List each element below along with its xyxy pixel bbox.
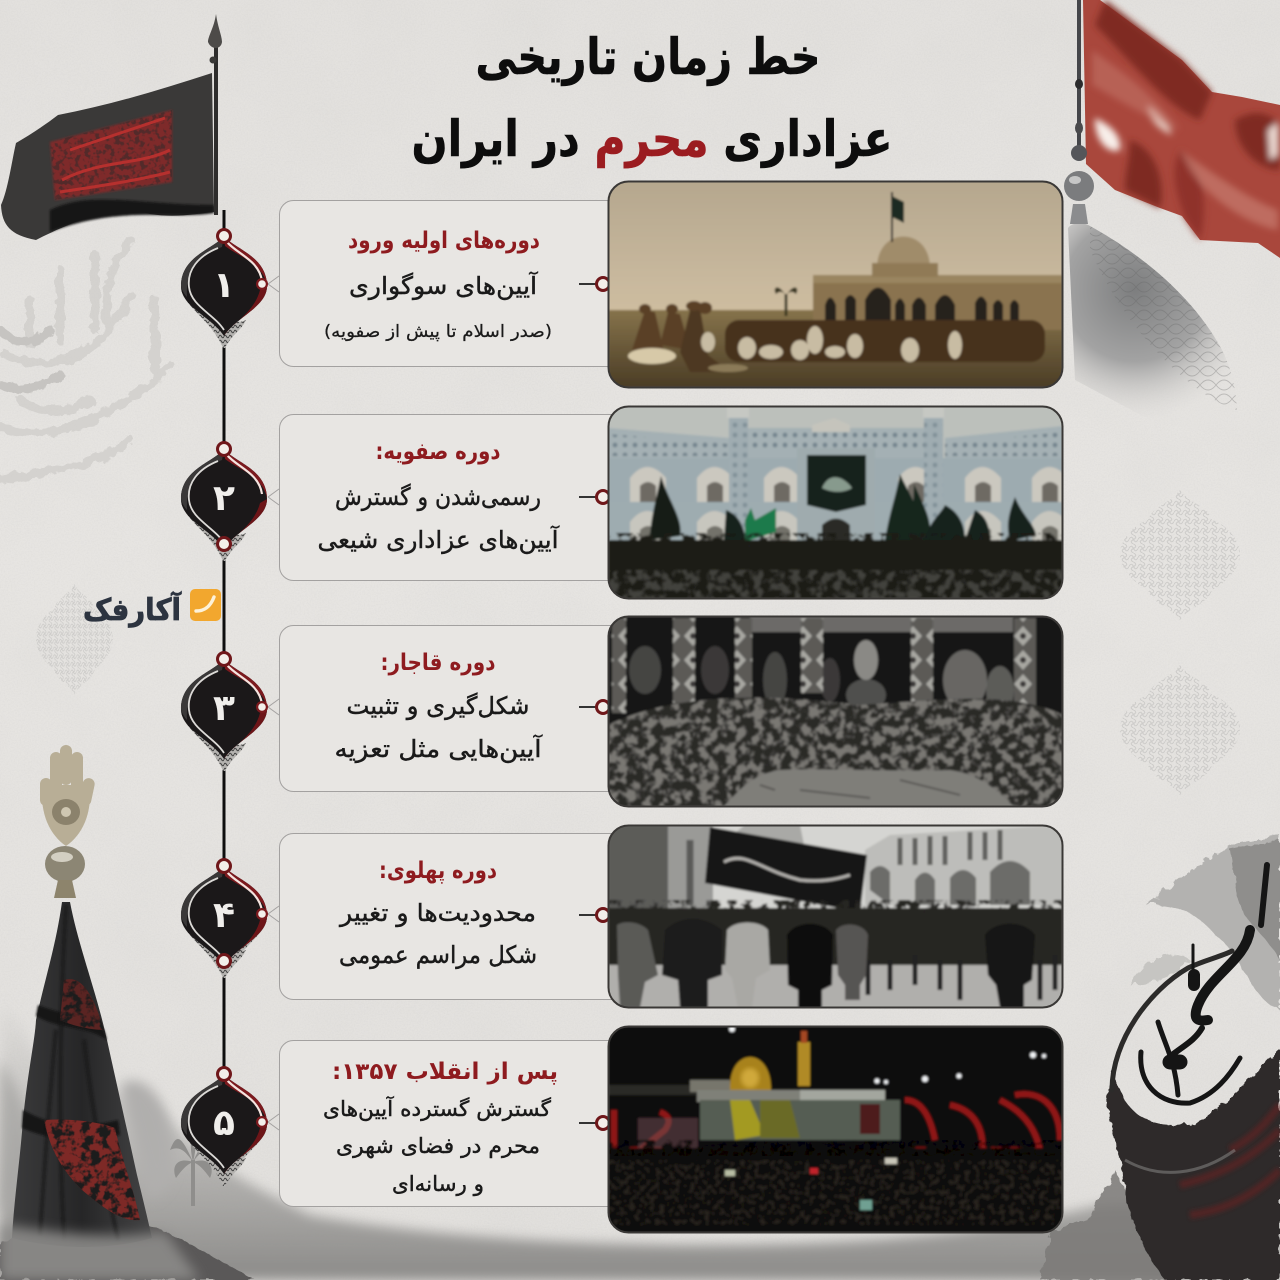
- logo: orange badge and wordmark: آکارفک: [83, 591, 182, 628]
- icon: hand: [40, 745, 96, 846]
- ghost calligraphy left: [0, 240, 170, 480]
- step 1: [181, 200, 624, 366]
- card 2: رسمی‌شدن و گسترش: [335, 483, 541, 511]
- connector 5: [579, 1115, 611, 1131]
- medallion 4: [181, 858, 268, 978]
- card 5: و رسانه‌ای: [392, 1172, 484, 1196]
- alam: hand finial and black cloth: [0, 745, 200, 1280]
- medallion 1: [181, 228, 268, 348]
- step 3: [181, 626, 624, 792]
- medallion 3: [181, 651, 268, 771]
- card 1: آیین‌های سوگواری: [349, 271, 538, 300]
- finial right: [1064, 0, 1094, 224]
- card 5: [268, 1040, 624, 1206]
- card 2: دوره صفویه:: [376, 439, 501, 465]
- card 3: [268, 626, 624, 792]
- card 4: محدودیت‌ها و تغییر: [339, 899, 536, 927]
- photo 4 frame: [608, 826, 1062, 1008]
- flag pole left: [208, 14, 222, 215]
- medallion 5: ۵: [213, 1103, 235, 1144]
- connector 1: [579, 276, 611, 292]
- ornament: right lace top: [1120, 490, 1240, 620]
- smoke and hills at the bottom: [0, 1000, 1280, 1280]
- medallion 1: ۱: [213, 265, 235, 306]
- ink body: [1108, 1048, 1280, 1280]
- title line 2: عزاداری محرم در ایران: [412, 110, 892, 169]
- card 4: [268, 834, 624, 1000]
- medallion 2: ۲: [213, 478, 235, 519]
- dome right: [1068, 223, 1237, 440]
- logo: orange badge and wordmark: [83, 589, 221, 628]
- step 4: [181, 834, 624, 1000]
- ink strokes: [1112, 865, 1267, 1103]
- photo 5: night shrine: [608, 1026, 1063, 1233]
- red streaks: [1180, 1105, 1280, 1215]
- step 5: [181, 1040, 624, 1206]
- photo 1: desert shrine: [608, 181, 1063, 388]
- ornament: left lace: [36, 584, 113, 694]
- card 2: آیین‌های عزاداری شیعی: [318, 525, 560, 554]
- card 3: آیین‌هایی مثل تعزیه: [334, 734, 543, 763]
- card 5: پس از انقلاب ۱۳۵۷:: [332, 1059, 558, 1085]
- card 4: دوره پهلوی:: [379, 858, 497, 884]
- card 4: شکل مراسم عمومی: [339, 941, 537, 969]
- smoke wash: [1130, 835, 1280, 1010]
- photo 4: pahlavi procession: [608, 825, 1063, 1008]
- card 1: دوره‌های اولیه ورود: [348, 228, 540, 254]
- calligraphy bottom right: [1108, 835, 1280, 1280]
- ornament: right lace bottom: [1120, 665, 1240, 795]
- photo 1 frame: [608, 182, 1062, 388]
- medallion 4: ۴: [213, 895, 235, 936]
- step 2: [181, 414, 624, 580]
- connector 4: [579, 907, 611, 923]
- title: [412, 28, 892, 169]
- medallion 5: [181, 1066, 268, 1186]
- card 1: [268, 200, 624, 366]
- photo 3 frame: [608, 616, 1062, 806]
- flag: black with red calligraphy: [1, 73, 214, 240]
- connector 2: [579, 489, 611, 505]
- card 2: [268, 414, 624, 580]
- card 3: شکل‌گیری و تثبیت: [346, 692, 530, 720]
- palm tree silhouette: [170, 1130, 218, 1206]
- medallion 3: ۳: [213, 688, 235, 729]
- photo 2: safavid courtyard: [608, 406, 1063, 599]
- title line 1: خط زمان تاریخی: [476, 28, 820, 86]
- timeline line: [222, 210, 226, 1075]
- photo 2 frame: [608, 406, 1062, 598]
- card 1: (صدر اسلام تا پیش از صفویه): [324, 322, 552, 342]
- card 5: گسترش گسترده آیین‌های: [323, 1096, 551, 1121]
- card 5: محرم در فضای شهری: [336, 1134, 540, 1158]
- medallion 2: [181, 441, 267, 561]
- photo 5 frame: [608, 1026, 1062, 1232]
- connector 3: [579, 699, 611, 715]
- photo 3: qajar gathering: [608, 616, 1063, 807]
- card 3: دوره قاجار:: [380, 650, 496, 676]
- flag: red: [1083, 0, 1280, 258]
